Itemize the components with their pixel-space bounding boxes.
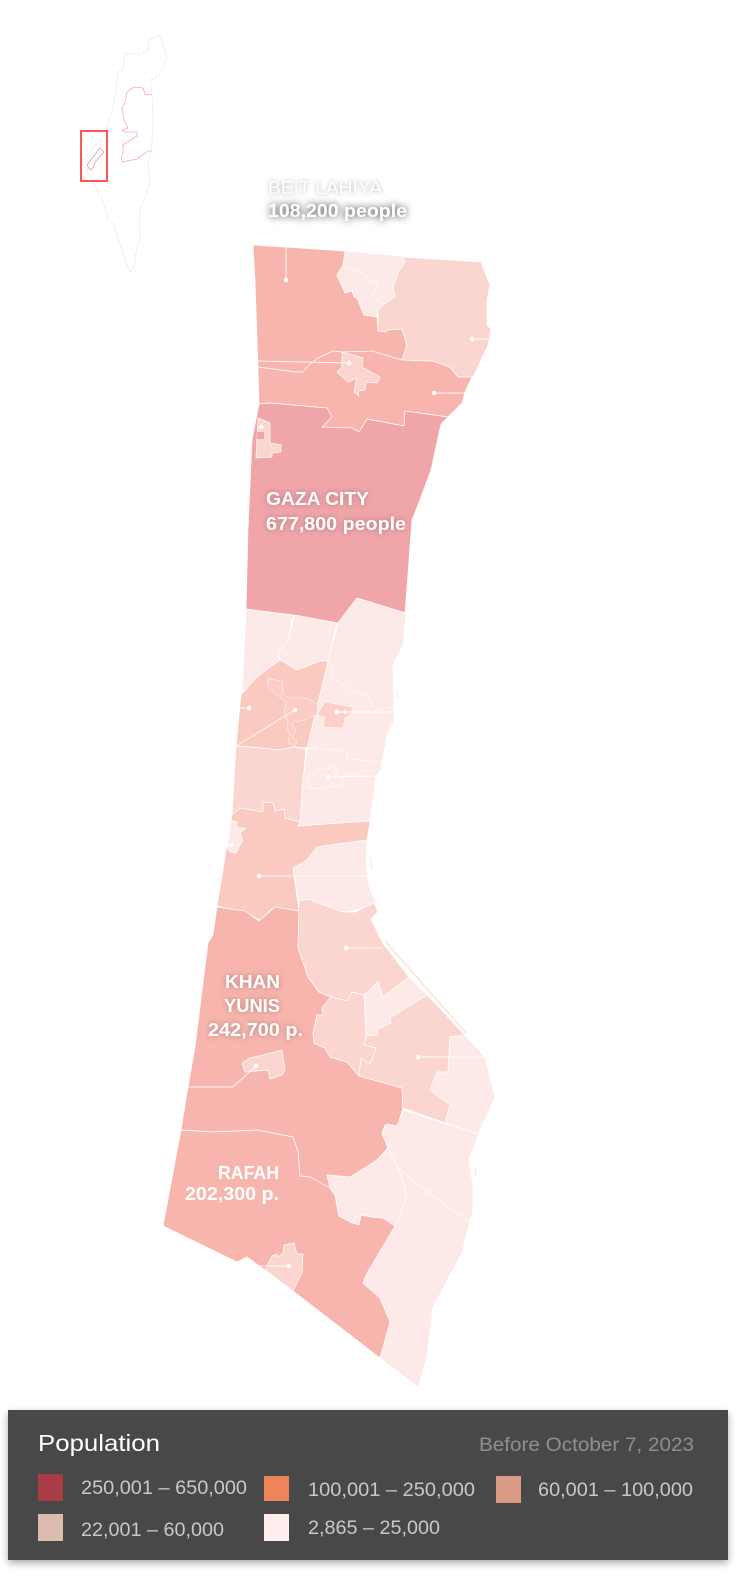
label: Rafah [185, 1163, 279, 1204]
region: Bureij camp [317, 702, 353, 728]
region: Rafah [163, 1130, 395, 1358]
legend label: 22,001 – 60,000: 22,001 – 60,000 [81, 1519, 224, 1541]
region: North Gaza east [378, 257, 491, 377]
legend title: Population [38, 1430, 160, 1456]
legend swatch: 60,001 – 100,000 [496, 1476, 521, 1503]
label: Gaza City: 677,800 people [266, 514, 406, 534]
label: Rafah: RAFAH [218, 1163, 279, 1183]
legend label: 60,001 – 100,000: 60,001 – 100,000 [538, 1479, 693, 1501]
region: Khan Yunis [181, 907, 403, 1188]
region: Bani Suheila [313, 992, 376, 1076]
region: Rafah north-east [382, 1110, 479, 1222]
region: Jabalia [258, 351, 472, 432]
coastal strip sliver [385, 941, 466, 1033]
region: Jabalia camp [337, 352, 380, 396]
label: Gaza City: GAZA CITY [266, 489, 369, 509]
label: Khan Yunis [208, 972, 303, 1040]
label: Khan Yunis: 242,700 p. [208, 1020, 303, 1040]
region: Khan Yunis camp [242, 1050, 285, 1079]
label: Rafah: 202,300 p. [185, 1184, 279, 1204]
legend label: 250,001 – 650,000: 250,001 – 650,000 [81, 1477, 247, 1499]
region: Abasan [359, 995, 465, 1123]
region: Bani Suheila strip [364, 977, 427, 1036]
region: Rafah south-east [363, 1167, 470, 1387]
region: North Gaza top [337, 251, 405, 317]
inset: locator rectangle [81, 131, 107, 181]
Gaza Strip map [163, 245, 495, 1387]
region: Nuseirat camp [268, 678, 318, 747]
region: Middle north [278, 615, 337, 670]
legend swatch: 250,001 – 650,000 [38, 1474, 63, 1501]
legend swatch: 2,865 – 25,000 [264, 1514, 289, 1541]
legend swatch: 22,001 – 60,000 [38, 1514, 63, 1541]
region: Rafah camp [265, 1243, 303, 1291]
region: Khuza'a [430, 1035, 495, 1134]
coastal slivers [370, 690, 476, 1177]
region: Wadi as-Salqa [293, 840, 376, 912]
label: Beit Lahiya [268, 178, 407, 221]
region: Shokat centre [327, 1148, 406, 1226]
legend label: 2,865 – 25,000: 2,865 – 25,000 [308, 1517, 440, 1539]
label: Beit Lahiya: 108,200 people [268, 201, 407, 221]
inset: West Bank outline [121, 87, 152, 162]
label: Gaza City [266, 489, 406, 534]
region: North Gaza west [253, 245, 407, 372]
legend panel [8, 1410, 728, 1560]
inset: Gaza Strip outline [87, 148, 104, 170]
label: Beit Lahiya: BEIT LAHIYA [268, 178, 382, 198]
legend swatch: 100,001 – 250,000 [264, 1476, 289, 1501]
legend label: 100,001 – 250,000: 100,001 – 250,000 [308, 1479, 475, 1501]
region: Middle east [298, 598, 406, 826]
legend date note: Before October 7, 2023 [479, 1434, 694, 1456]
region: Deir al-Balah [217, 802, 370, 920]
region: Deir al-Balah camp [227, 820, 246, 853]
region: Beach camp [256, 418, 281, 458]
region: Gaza City [246, 403, 448, 623]
region: Middle north-west [242, 609, 293, 695]
region: Qarara [298, 899, 409, 1001]
label: Khan Yunis: YUNIS [224, 996, 280, 1016]
label: Khan Yunis: KHAN [225, 972, 280, 992]
region: Nuseirat [236, 660, 328, 750]
inset locator map [81, 35, 167, 272]
region: Zawayda [232, 746, 306, 822]
inset: country outline [82, 35, 167, 272]
leader lines and dots [188, 247, 491, 1268]
region: Maghazi camp [308, 766, 343, 789]
